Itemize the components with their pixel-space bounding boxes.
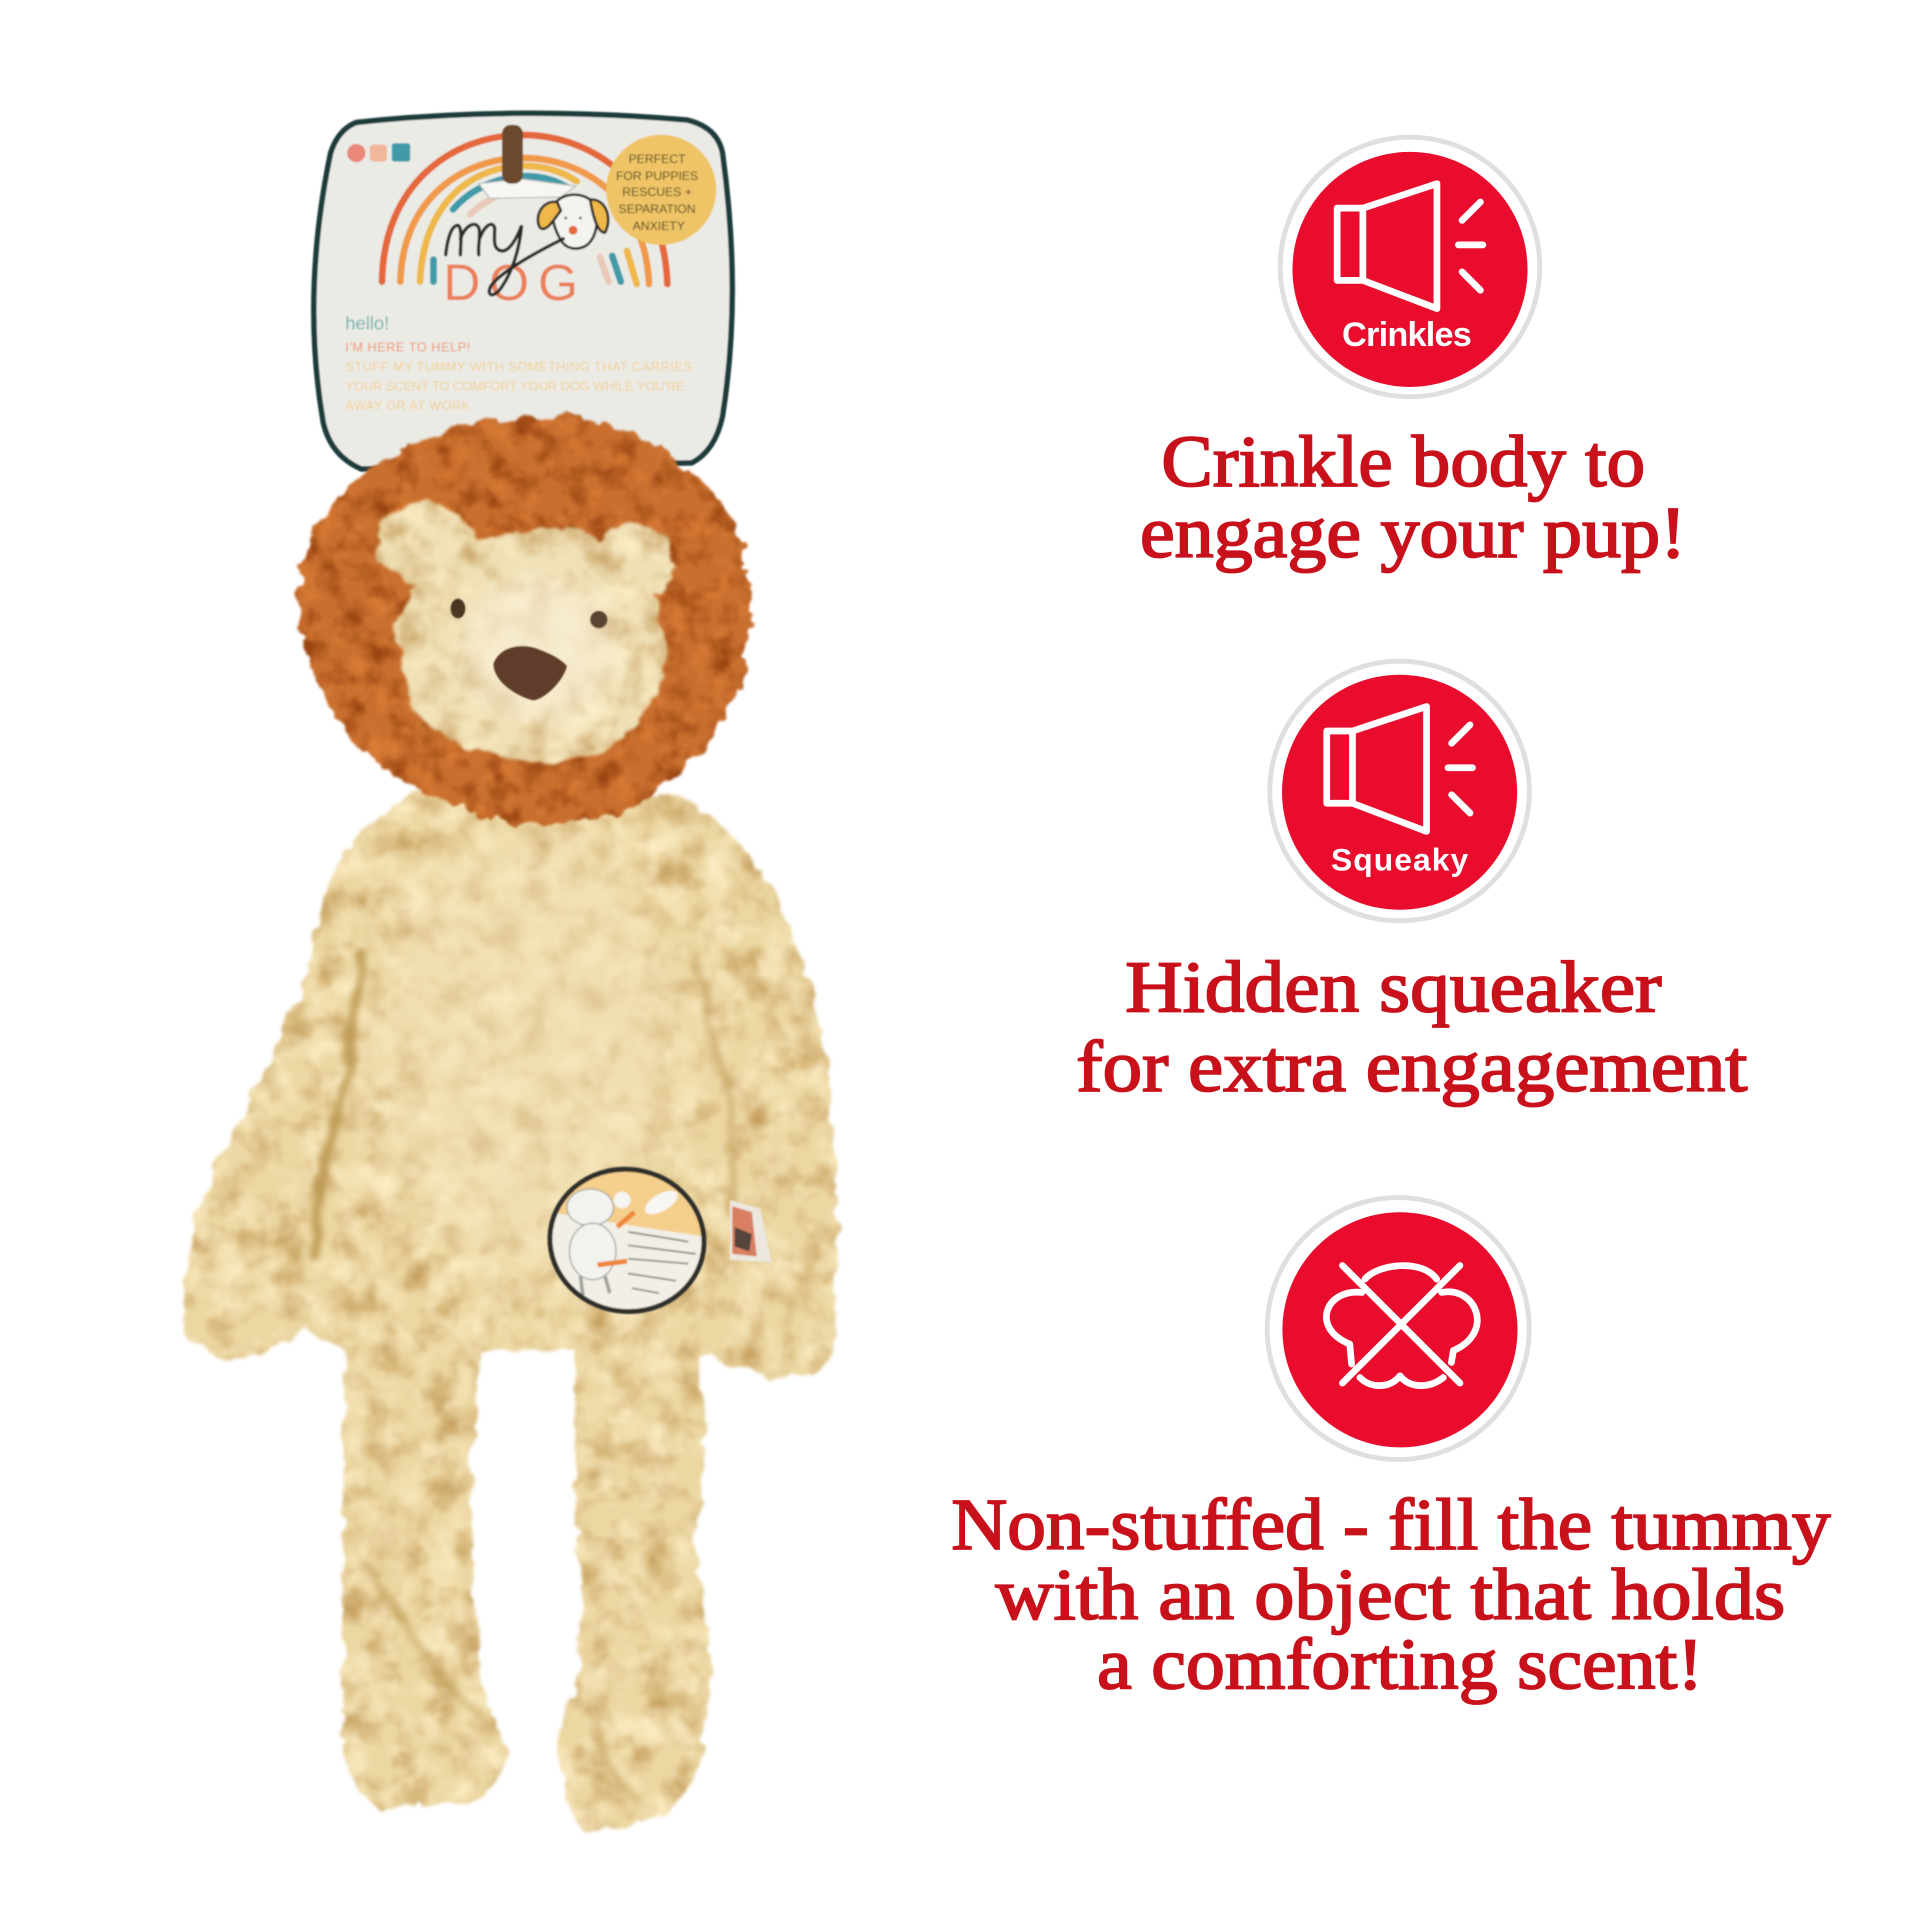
badge: RESCUES + bbox=[622, 185, 692, 199]
dog logo bbox=[446, 195, 608, 295]
eye left bbox=[451, 599, 465, 618]
heading: non-stuffed: with an object that holds bbox=[996, 1554, 1785, 1635]
hang tag bbox=[314, 113, 732, 469]
feature: non-stuffed bbox=[951, 1198, 1831, 1705]
tag copy: hello! bbox=[345, 312, 389, 333]
eye right bbox=[590, 611, 607, 628]
heading: hidden squeaker: Hidden squeaker bbox=[1125, 946, 1662, 1027]
badge: SEPARATION bbox=[619, 202, 696, 216]
muzzle highlight bbox=[463, 578, 615, 720]
ears and head bbox=[376, 502, 676, 763]
tummy patch bbox=[546, 1166, 708, 1316]
face bbox=[376, 502, 676, 763]
feature: squeaky bbox=[1076, 661, 1747, 1107]
nose bbox=[493, 646, 567, 700]
badge: FOR PUPPIES bbox=[616, 169, 698, 183]
tag copy: AWAY OR AT WORK. bbox=[345, 398, 474, 413]
arm seams bbox=[314, 954, 732, 1800]
badge: ANXIETY bbox=[633, 219, 685, 233]
heading: non-stuffed: Non-stuffed - fill the tummy bbox=[951, 1484, 1831, 1565]
tag copy bbox=[345, 312, 692, 413]
badge: PERFECT bbox=[629, 152, 686, 166]
lion plush toy bbox=[183, 415, 837, 1831]
heading: non-stuffed: a comforting scent! bbox=[1097, 1624, 1703, 1705]
icon: squeaky badge bbox=[1270, 661, 1529, 921]
feature: crinkles bbox=[1140, 137, 1686, 573]
heading: crinkle body: Crinkle body to bbox=[1161, 421, 1645, 502]
icon: no stuffing badge bbox=[1267, 1198, 1529, 1460]
orange mane bbox=[299, 415, 752, 824]
body, arms and legs bbox=[183, 787, 837, 1831]
sewn label bbox=[730, 1200, 771, 1262]
torso highlight bbox=[373, 833, 680, 1273]
tag copy: YOUR SCENT TO COMFORT YOUR DOG WHILE YOU'RE bbox=[345, 379, 685, 394]
icon: crinkles badge bbox=[1280, 137, 1540, 397]
icon: squeaky badge: Squeaky bbox=[1331, 842, 1468, 878]
tag card bbox=[314, 113, 732, 469]
heading: crinkle body: engage your pup! bbox=[1140, 492, 1686, 573]
teddy illustration bbox=[567, 1189, 613, 1226]
social icons bbox=[347, 143, 410, 162]
rainbow logo bbox=[382, 135, 667, 284]
icon: crinkles badge: Crinkles bbox=[1342, 316, 1472, 354]
badge bbox=[606, 135, 716, 245]
tag copy: I'M HERE TO HELP! bbox=[345, 339, 470, 354]
hang hole bbox=[479, 125, 576, 198]
tag copy: STUFF MY TUMMY WITH SOMETHING THAT CARRIES bbox=[345, 359, 692, 374]
heading: hidden squeaker: for extra engagement bbox=[1076, 1026, 1747, 1107]
DOG wordmark: DOG bbox=[443, 253, 578, 311]
